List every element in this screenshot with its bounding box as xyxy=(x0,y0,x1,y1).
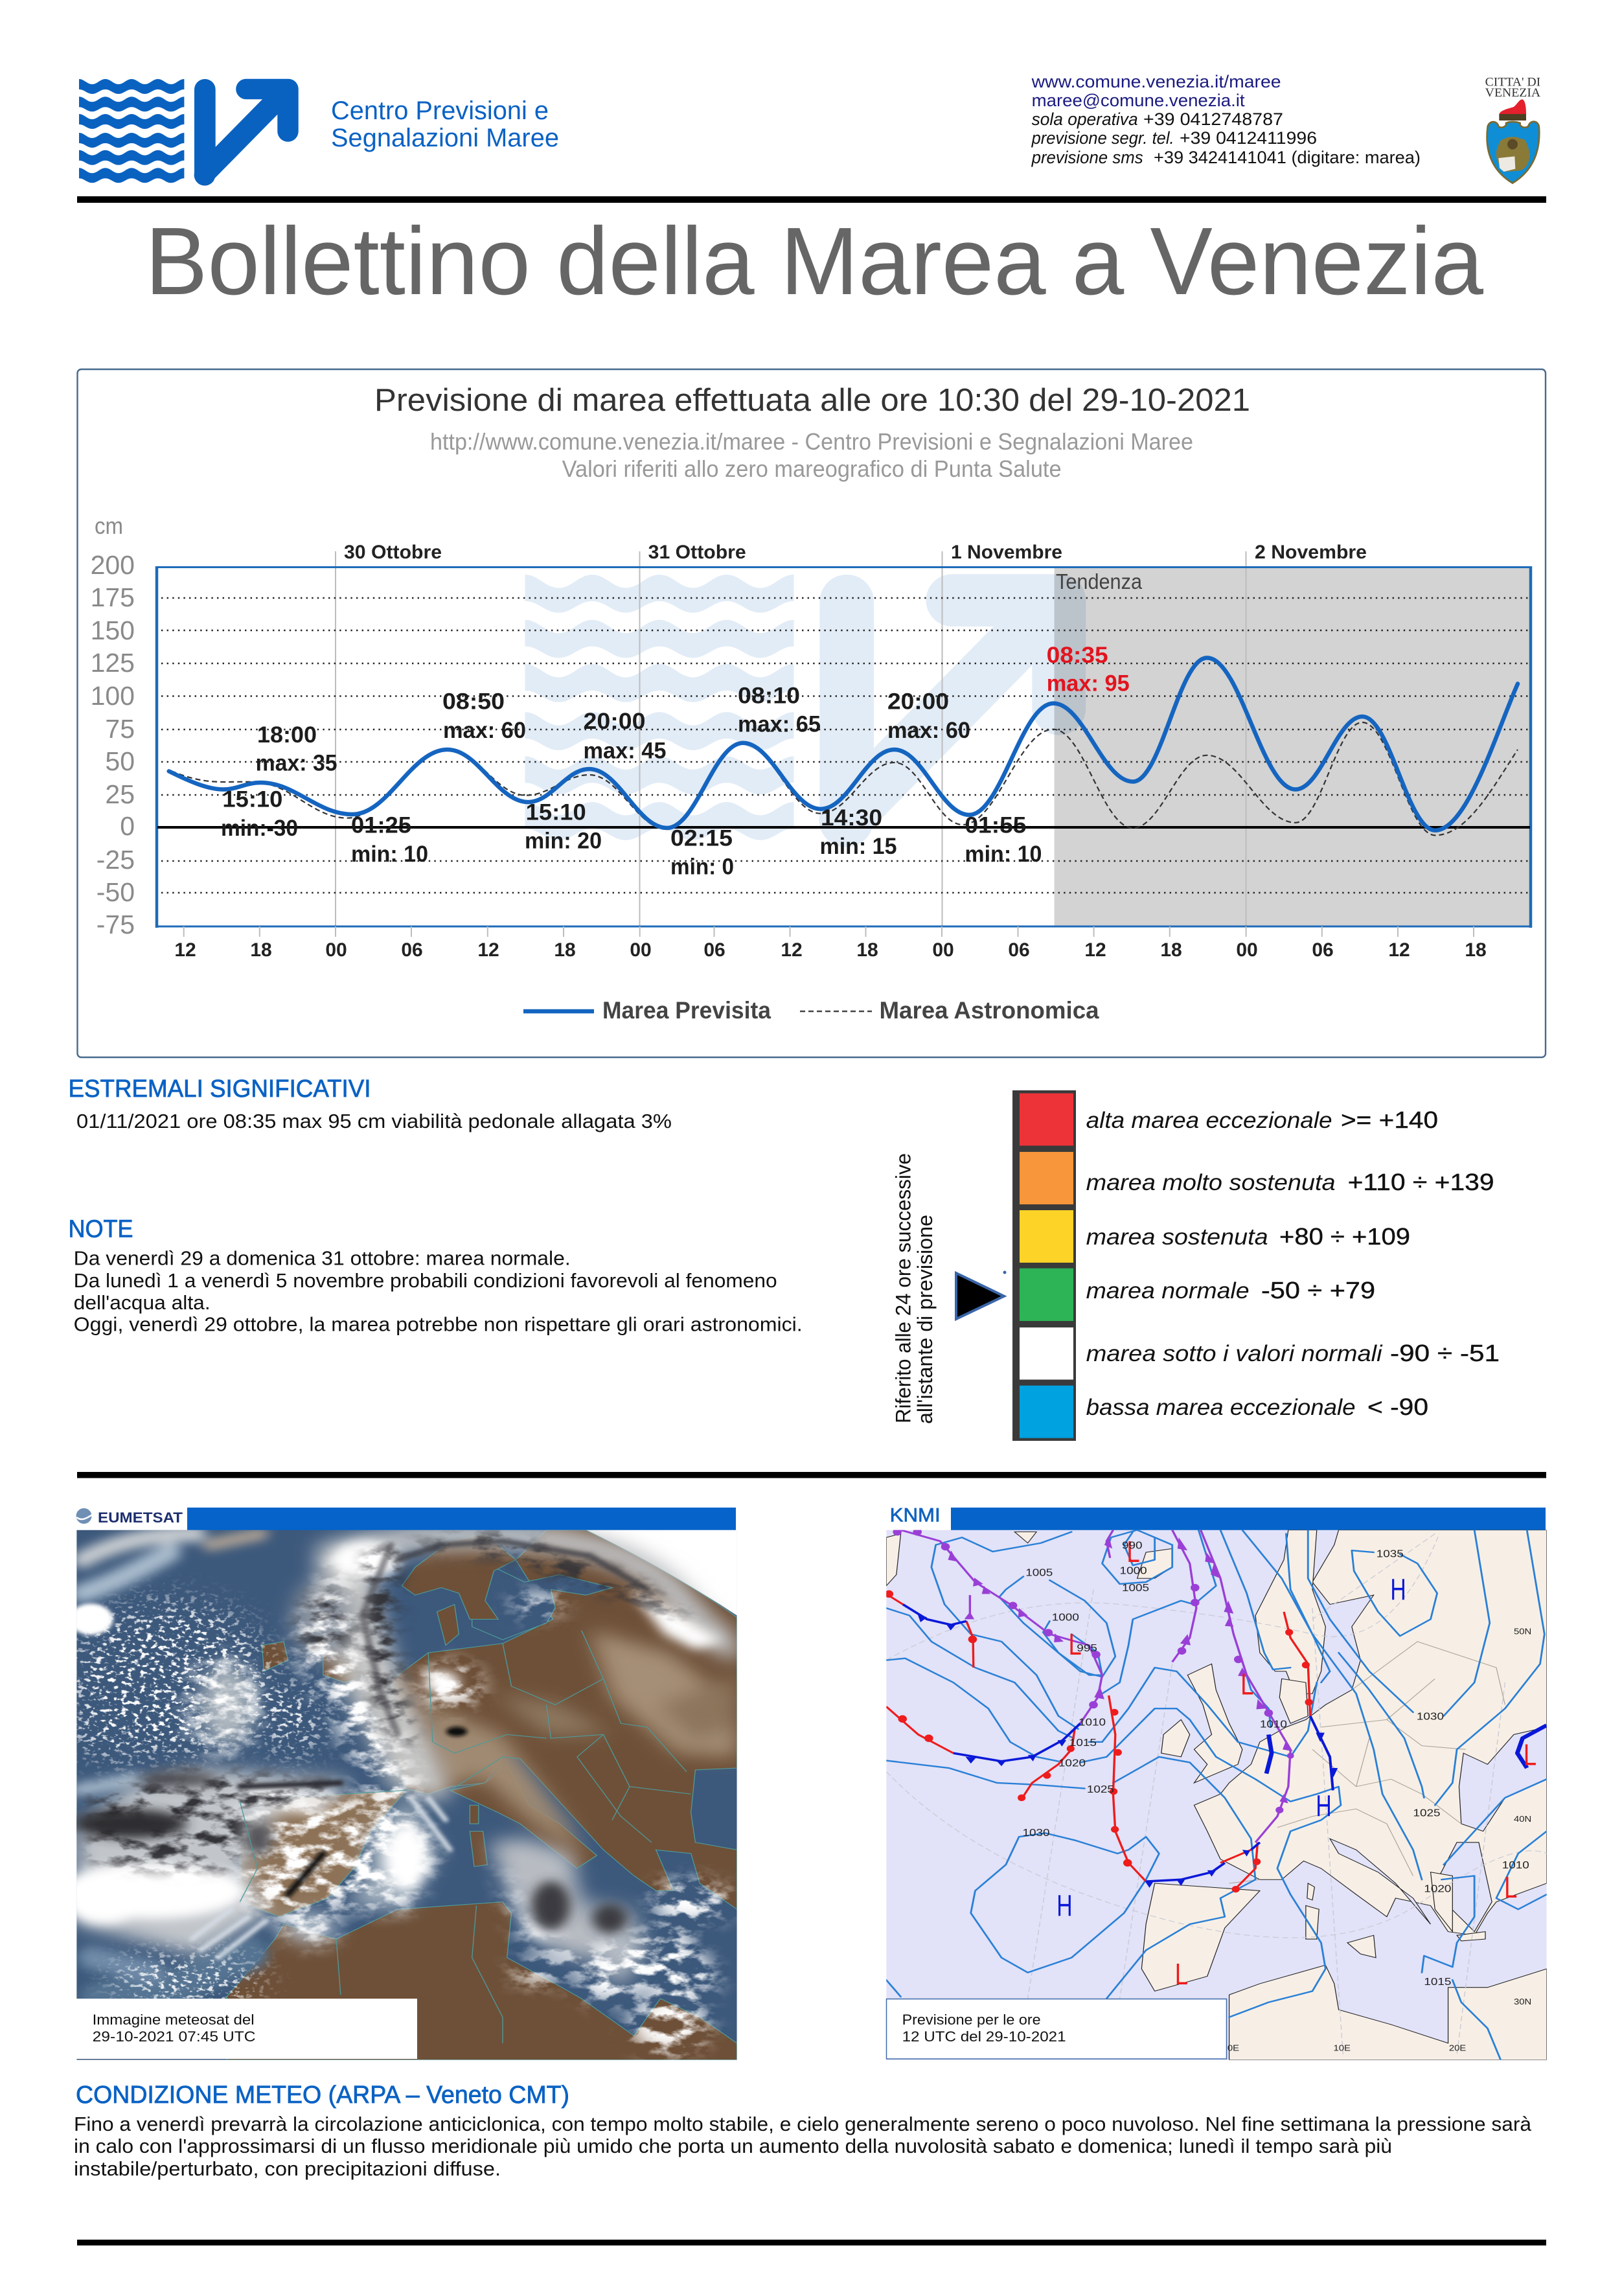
atlantic streaks xyxy=(192,1798,450,1958)
divider: bottom rule xyxy=(77,2240,1546,2245)
upper left wisps xyxy=(78,1533,262,1999)
pressure centres xyxy=(1057,1535,1536,1991)
contact details: maree@comune.venezia.it xyxy=(1032,91,1245,110)
chart subtitle: Valori riferiti allo zero mareografico di Punta Salute xyxy=(562,455,1062,482)
extreme labels: 01:25 xyxy=(351,813,411,838)
chart subtitle xyxy=(430,428,1193,482)
extreme labels: 01:55 xyxy=(965,813,1026,838)
scale labels: -90 ÷ -51 xyxy=(1390,1340,1500,1366)
chart legend: Marea Previsita xyxy=(602,997,771,1024)
extreme labels: min: 10 xyxy=(351,842,428,867)
text: notes: Oggi, venerdì 29 ottobre, la marea potrebbe non rispettare gli orari astronomici. xyxy=(74,1313,803,1336)
y axis labels: -25 xyxy=(97,845,135,875)
x axis labels: 00 xyxy=(1236,939,1258,961)
extreme labels: 02:15 xyxy=(670,825,733,851)
astronomical tide line xyxy=(171,722,1518,835)
text: notes xyxy=(74,1247,803,1336)
isobar values: 1020 xyxy=(1424,1883,1452,1894)
scale labels: marea sostenuta xyxy=(1086,1224,1268,1250)
panel: tide forecast chart xyxy=(78,369,1546,1057)
x axis labels: 18 xyxy=(1465,939,1487,961)
extreme labels: 20:00 xyxy=(583,709,645,734)
extreme labels: min: 0 xyxy=(670,855,734,880)
extreme labels: 15:10 xyxy=(222,787,282,812)
title: Bollettino della Marea a Venezia xyxy=(145,208,1484,315)
x axis labels: 12 xyxy=(781,939,803,961)
map caption xyxy=(886,1999,1227,2059)
y axis labels: 125 xyxy=(91,648,135,678)
day labels: 31 Ottobre xyxy=(648,542,746,563)
text: notes: Da lunedì 1 a venerdì 5 novembre probabili condizioni favorevoli al fenomeno xyxy=(74,1269,777,1292)
contact details: +39 3424141041 (digitare: marea) xyxy=(1154,148,1421,167)
extreme labels: max: 35 xyxy=(256,750,337,776)
satellite caption: Immagine meteosat del xyxy=(93,2012,255,2028)
divider: middle rule xyxy=(77,1472,1546,1478)
tendency shaded area xyxy=(1055,568,1531,926)
text: weather conditions xyxy=(74,2113,1532,2180)
isobar values: 1015 xyxy=(1424,1976,1452,1988)
isobar values: 1005 xyxy=(1025,1567,1053,1578)
x axis labels: 18 xyxy=(1160,939,1182,961)
isobar values: 995 xyxy=(1077,1642,1097,1653)
pressure centres: L xyxy=(1524,1738,1536,1771)
plot border xyxy=(157,568,1530,926)
extreme labels: max: 45 xyxy=(583,739,666,763)
icon: Città di Venezia crest: VENEZIA xyxy=(1485,86,1540,100)
map caption: Previsione per le ore xyxy=(902,2012,1041,2028)
pressure centres: L xyxy=(1504,1871,1517,1904)
panel: EUMETSAT satellite image xyxy=(60,1508,737,2060)
extreme labels: 14:30 xyxy=(821,805,882,831)
y axis labels: 175 xyxy=(91,582,135,612)
rotated note: 24 hours reference xyxy=(892,1153,937,1424)
scale labels: marea normale xyxy=(1086,1278,1250,1303)
text: weather conditions: in calo con l'approssimarsi di un flusso meridionale più umido che porta un aumento della nuvolosità sabato e domenica; lunedì il tempo sarà più xyxy=(74,2135,1392,2157)
icon: current level pointer xyxy=(956,1271,1007,1319)
text: significant extreme: 01/11/2021 ore 08:35 max 95 cm viabilità pedonale allagata 3% xyxy=(76,1110,672,1132)
graticule xyxy=(886,1533,1547,2054)
zero line xyxy=(157,826,1530,829)
y axis labels: 0 xyxy=(120,811,135,841)
divider: header rule xyxy=(77,196,1546,203)
x axis labels: 18 xyxy=(554,939,576,961)
logo wordmark: Segnalazioni Maree xyxy=(331,124,559,152)
KNMI header band xyxy=(890,1504,1546,1530)
pressure centres: H xyxy=(1390,1573,1406,1607)
day labels: 30 Ottobre xyxy=(344,542,442,563)
isobar values: 1005 xyxy=(1122,1581,1149,1593)
Atlantic speckled cloud xyxy=(69,1601,323,2006)
isobar values: 1015 xyxy=(1069,1737,1097,1749)
watermark logo xyxy=(525,574,1086,847)
EUMETSAT header band xyxy=(76,1508,736,1530)
y axis labels: -50 xyxy=(97,877,135,907)
heading: note: NOTE xyxy=(69,1215,133,1243)
isobars xyxy=(886,1530,1547,2060)
tendency label: Tendenza xyxy=(1056,569,1143,593)
x axis labels: 06 xyxy=(401,939,423,961)
isobar values: 0E xyxy=(1228,2043,1239,2052)
extreme labels: min: 10 xyxy=(965,842,1042,867)
contact details: sola operativa xyxy=(1032,109,1138,129)
contact details: previsione sms xyxy=(1031,148,1143,167)
chart title: Previsione di marea effettuata alle ore 10:30 del 29-10-2021 xyxy=(374,383,1250,418)
extreme labels: 08:50 xyxy=(442,689,505,715)
x axis labels: 00 xyxy=(630,939,652,961)
extreme labels: min:-30 xyxy=(221,816,298,841)
x axis labels: 12 xyxy=(1084,939,1106,961)
y axis labels: 150 xyxy=(91,615,135,645)
front markers xyxy=(893,1528,1294,1813)
panel: tide level colour scale xyxy=(1012,1090,1076,1441)
pressure centres: L xyxy=(1175,1958,1188,1991)
contact details: previsione segr. tel. xyxy=(1031,128,1174,148)
KNMI header band: KNMI xyxy=(890,1504,941,1526)
text: notes: Da venerdì 29 a domenica 31 ottobre: marea normale. xyxy=(74,1247,571,1270)
y axis labels: -75 xyxy=(97,910,135,939)
x axis labels: 18 xyxy=(856,939,878,961)
soft cloud base xyxy=(76,1536,737,1988)
extreme labels: 18:00 xyxy=(257,722,317,748)
scale labels: bassa marea eccezionale xyxy=(1086,1395,1356,1420)
isobar values: 10E xyxy=(1333,2043,1351,2052)
isobar values: 1025 xyxy=(1087,1783,1114,1795)
x axis labels: 06 xyxy=(1312,939,1334,961)
contact details xyxy=(1031,72,1421,167)
scale labels xyxy=(1086,1107,1500,1420)
day labels: 1 Novembre xyxy=(951,542,1062,563)
scale labels: +80 ÷ +109 xyxy=(1279,1223,1410,1250)
pressure centres: L xyxy=(1240,1668,1253,1701)
extreme labels xyxy=(221,643,1130,880)
logo wordmark: Centro Previsioni e xyxy=(331,97,549,125)
text: notes: dell'acqua alta. xyxy=(74,1291,211,1314)
contact details: +39 0412748787 xyxy=(1143,109,1283,129)
isobar values: 20E xyxy=(1449,2043,1466,2052)
x axis labels: 00 xyxy=(932,939,954,961)
scale labels: +110 ÷ +139 xyxy=(1348,1169,1494,1195)
isobar values: 1010 xyxy=(1502,1859,1529,1871)
x axis labels: 00 xyxy=(325,939,347,961)
EUMETSAT header band: EUMETSAT xyxy=(98,1510,183,1526)
pressure centres: H xyxy=(1316,1789,1332,1823)
extreme labels: 15:10 xyxy=(526,799,586,825)
contact details: +39 0412411996 xyxy=(1180,128,1317,148)
extreme labels: max: 65 xyxy=(738,712,821,737)
pressure centres: L xyxy=(1068,1628,1082,1661)
heading: estremali significativi: ESTREMALI SIGNIFICATIVI xyxy=(69,1075,371,1103)
day labels: 2 Novembre xyxy=(1255,542,1367,563)
text: weather conditions: instabile/perturbato, con precipitazioni diffuse. xyxy=(74,2157,501,2180)
rotated note: 24 hours reference: all'istante di previsione xyxy=(913,1215,937,1424)
country borders xyxy=(1229,1642,1505,1883)
rotated note: 24 hours reference: Riferito alle 24 ore successive xyxy=(892,1153,915,1423)
x tick marks xyxy=(184,926,1474,937)
isobar values: 1020 xyxy=(1058,1757,1086,1769)
extreme labels: 08:10 xyxy=(738,683,800,709)
x axis labels xyxy=(174,939,1487,961)
x axis labels: 06 xyxy=(703,939,725,961)
horizontal grid lines xyxy=(161,598,1529,893)
y axis labels: 100 xyxy=(91,681,135,711)
y axis labels xyxy=(91,550,135,939)
chart legend xyxy=(523,997,1099,1024)
dark cloud tops xyxy=(240,1541,647,1894)
scale labels: -50 ÷ +79 xyxy=(1261,1277,1375,1303)
panel: KNMI weather map xyxy=(885,1504,1547,2060)
lighter land xyxy=(428,1631,737,1854)
extreme labels: 20:00 xyxy=(887,689,949,715)
logo: Centro Previsioni e Segnalazioni Maree xyxy=(79,79,559,186)
icon: Città di Venezia crest: CITTA' DI xyxy=(1485,76,1540,89)
x axis labels: 12 xyxy=(477,939,499,961)
contact details: www.comune.venezia.it/maree xyxy=(1031,72,1281,91)
isobar values: 1010 xyxy=(1260,1718,1287,1730)
y axis labels: 50 xyxy=(105,746,135,776)
extreme labels: max: 60 xyxy=(887,718,970,743)
isobar values: 40N xyxy=(1514,1815,1531,1824)
y axis labels: 200 xyxy=(91,550,135,580)
x axis labels: 18 xyxy=(250,939,272,961)
y axis labels: 75 xyxy=(105,714,135,744)
satellite caption: 29-10-2021 07:45 UTC xyxy=(93,2028,256,2045)
scale labels: < -90 xyxy=(1367,1394,1428,1420)
icon: Città di Venezia crest xyxy=(1485,76,1540,183)
fronts xyxy=(885,1528,1547,1892)
logo wordmark xyxy=(331,97,559,152)
isobar values: 1010 xyxy=(1079,1716,1106,1728)
synoptic map xyxy=(885,1528,1547,2060)
text: weather conditions: Fino a venerdì prevarrà la circolazione anticiclonica, con tempo molto stabile, e cielo generalmente sereno o poco nuvoloso. Nel fine settimana la pressione sarà xyxy=(74,2113,1532,2135)
pressure centres: H xyxy=(1057,1889,1073,1923)
extreme labels: min: 20 xyxy=(525,829,602,854)
scale labels: marea sotto i valori normali xyxy=(1086,1341,1383,1366)
isobar values: 50N xyxy=(1514,1627,1531,1636)
satellite imagery xyxy=(60,1530,737,2060)
map caption: 12 UTC del 29-10-2021 xyxy=(902,2028,1066,2045)
forecast tide line xyxy=(169,658,1518,831)
x axis labels: 06 xyxy=(1008,939,1030,961)
borders xyxy=(240,1631,691,2043)
isobar values: 1030 xyxy=(1022,1826,1050,1839)
logo mark: waves and arrow xyxy=(79,79,299,186)
isobar values: 1000 xyxy=(1052,1611,1079,1623)
isobar values: 30N xyxy=(1514,1997,1531,2006)
white cloud masses xyxy=(60,1541,722,1943)
isobar values xyxy=(1022,1539,1531,2052)
chart subtitle: http://www.comune.venezia.it/maree - Centro Previsioni e Segnalazioni Maree xyxy=(430,428,1193,455)
grey mottling xyxy=(91,1533,700,1868)
isobar values: 1025 xyxy=(1413,1807,1441,1819)
day labels xyxy=(344,542,1367,563)
chart legend: Marea Astronomica xyxy=(880,997,1099,1024)
x axis labels: 12 xyxy=(174,939,196,961)
extreme labels: max: 60 xyxy=(443,718,526,743)
satellite caption xyxy=(76,1999,417,2059)
white cloud texture xyxy=(187,1545,731,2054)
extreme labels: max: 95 xyxy=(1047,671,1130,696)
y axis unit: cm xyxy=(95,512,123,539)
extreme labels: min: 15 xyxy=(820,834,897,859)
scale labels: marea molto sostenuta xyxy=(1086,1170,1336,1195)
y axis labels: 25 xyxy=(105,779,135,809)
isobar values: 990 xyxy=(1122,1539,1143,1551)
isobar values: 1000 xyxy=(1120,1565,1147,1576)
land masses xyxy=(886,1530,1547,2060)
extreme labels: 08:35 xyxy=(1047,643,1108,668)
heading: condizione meteo: CONDIZIONE METEO (ARPA – Veneto CMT) xyxy=(76,2082,569,2109)
isobar values: 1035 xyxy=(1376,1548,1404,1559)
x axis labels: 12 xyxy=(1388,939,1410,961)
day separators xyxy=(336,551,1246,926)
scale labels: >= +140 xyxy=(1341,1107,1438,1133)
earth limb xyxy=(582,1530,737,1616)
pressure centres: L xyxy=(1126,1535,1140,1568)
isobar values: 1030 xyxy=(1417,1710,1444,1722)
scale labels: alta marea eccezionale xyxy=(1086,1108,1332,1133)
